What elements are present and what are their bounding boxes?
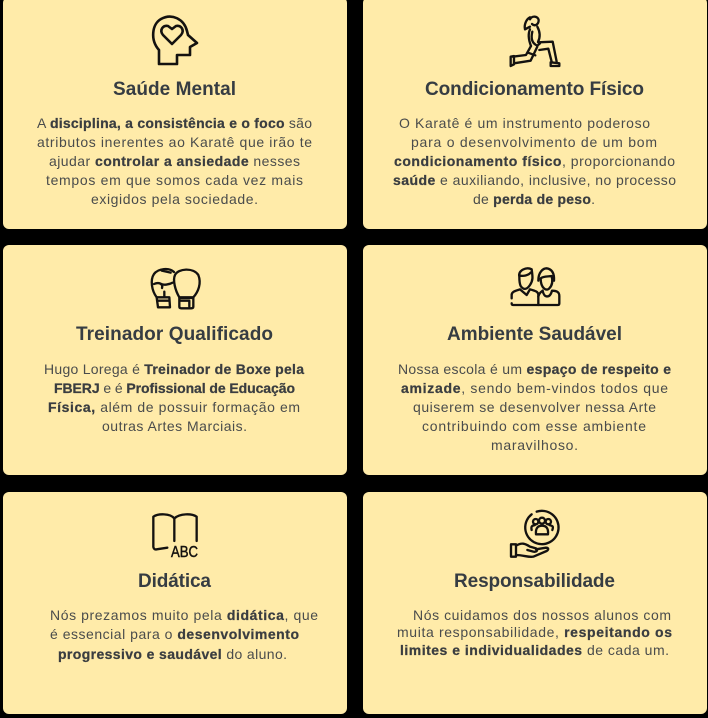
body text: Responsabilidade	[397, 607, 672, 658]
body text: Ambiente Saudável: contribuindo com esse ambiente	[422, 418, 646, 434]
panel: Responsabilidade	[363, 492, 707, 714]
body text: Saúde Mental: A disciplina, a consistência e o foco são	[37, 115, 312, 131]
body text: Condicionamento Físico: saúde e auxiliando, inclusive, no processo	[393, 172, 676, 188]
body text: Didática: Nós prezamos muito pela didática, que	[50, 607, 318, 623]
body text: Condicionamento Físico: O Karatê é um instrumento poderoso	[399, 115, 650, 131]
body text: Didática: é essencial para o desenvolvimento	[50, 626, 299, 642]
heading: Didática: Didática	[138, 571, 211, 592]
body text: Responsabilidade: muita responsabilidade, respeitando os	[397, 624, 672, 640]
panel: Didática	[3, 492, 347, 714]
icon: head with heart	[153, 17, 197, 64]
heading: Saúde Mental: Saúde Mental	[113, 79, 236, 100]
icon: open book with ABC: ABC	[171, 544, 198, 561]
body text: Condicionamento Físico	[393, 115, 676, 207]
body text: Saúde Mental: exigidos pela sociedade.	[91, 191, 258, 207]
heading: Condicionamento Físico: Condicionamento Físico	[425, 79, 644, 100]
body text: Condicionamento Físico: para o desenvolvimento de um bom	[411, 134, 657, 150]
body text: Saúde Mental: tempos em que somos cada vez mais	[46, 172, 303, 188]
body text: Ambiente Saudável: quiserem se desenvolver nessa Arte	[413, 399, 656, 415]
body text: Responsabilidade: limites e individualidades de cada um.	[400, 642, 669, 658]
body text: Treinador Qualificado: Física, além de possuir formação em	[48, 399, 300, 415]
body text: Didática	[50, 607, 318, 662]
body text: Saúde Mental: atributos inerentes ao Karatê que irão te	[37, 134, 312, 150]
body text: Treinador Qualificado	[44, 361, 304, 434]
body text: Ambiente Saudável: maravilhoso.	[491, 437, 578, 453]
body text: Saúde Mental	[37, 115, 312, 207]
heading: Responsabilidade: Responsabilidade	[454, 571, 615, 592]
panel: Saúde Mental	[3, 0, 347, 229]
body text: Ambiente Saudável	[398, 361, 671, 453]
body text: Ambiente Saudável: amizade, sendo bem-vindos todos que	[401, 380, 668, 396]
heading: Ambiente Saudável: Ambiente Saudável	[447, 324, 622, 345]
panel: Treinador Qualificado	[3, 245, 347, 475]
icon: boxing gloves	[152, 269, 200, 308]
body text: Didática: progressivo e saudável do aluno.	[58, 646, 287, 662]
body text: Treinador Qualificado: FBERJ e é Profissional de Educação	[54, 380, 295, 396]
body text: Saúde Mental: ajudar controlar a ansiedade nesses	[49, 153, 300, 169]
body text: Ambiente Saudável: Nossa escola é um espaço de respeito e	[398, 361, 671, 377]
body text: Treinador Qualificado: Hugo Lorega é Treinador de Boxe pela	[44, 361, 304, 377]
icon: hand holding group of people	[511, 511, 559, 557]
icon: open book with ABC	[153, 514, 198, 561]
icon: woman doing lunge	[511, 17, 559, 66]
body text: Responsabilidade: Nós cuidamos dos nossos alunos com	[413, 607, 671, 623]
heading: Treinador Qualificado: Treinador Qualificado	[76, 324, 273, 345]
panel: Ambiente Saudável	[363, 245, 707, 475]
icon: two people	[512, 268, 559, 305]
body text: Condicionamento Físico: de perda de peso.	[473, 191, 595, 207]
body text: Condicionamento Físico: condicionamento físico, proporcionando	[394, 153, 675, 169]
body text: Treinador Qualificado: outras Artes Marciais.	[102, 418, 247, 434]
panel: Condicionamento Físico	[363, 0, 707, 229]
